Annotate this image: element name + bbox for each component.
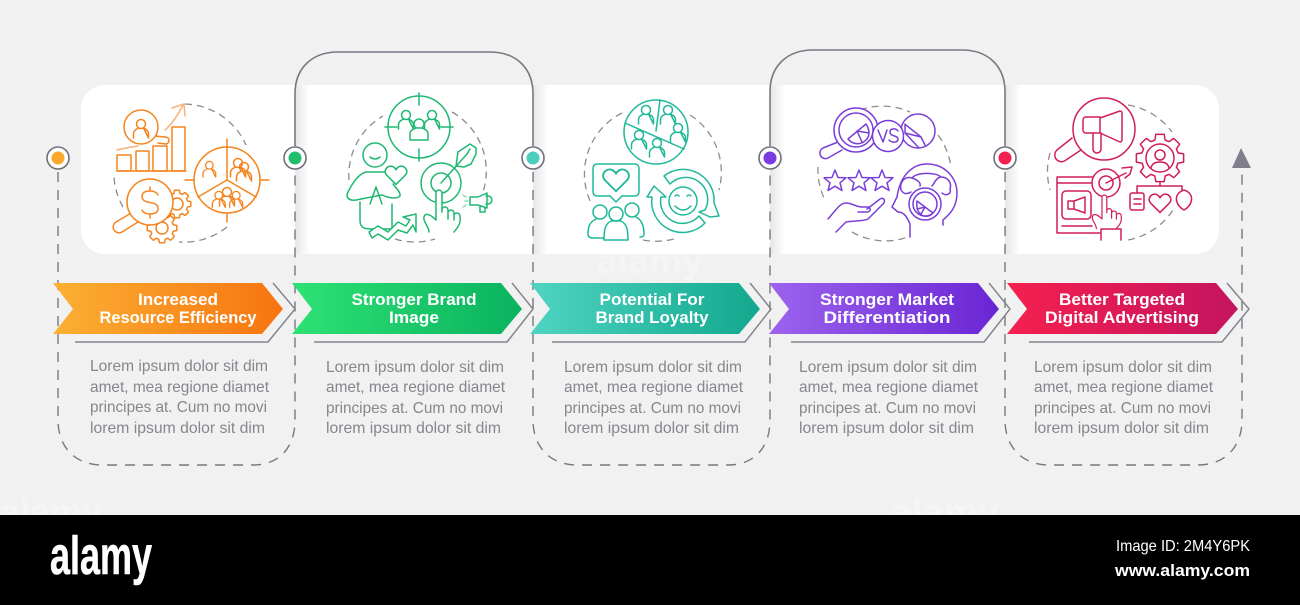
step 3 description: lorem ipsum dolor sit dim [564,420,739,437]
footer logo: alamy [50,526,152,586]
timeline marker 1 [47,147,69,169]
step 1 description: lorem ipsum dolor sit dim [90,420,265,437]
step 4 chevron and heading: Stronger Market [820,290,954,309]
watermark [0,240,999,532]
step 3 description: amet, mea regione diamet [564,379,744,396]
step 1 chevron and heading [53,283,295,342]
step 2 description: Lorem ipsum dolor sit dim [326,359,504,376]
step 5 chevron and heading: Digital Advertising [1045,308,1199,327]
step 2 description: lorem ipsum dolor sit dim [326,420,501,437]
arrowhead: end of timeline [1232,148,1251,168]
step 1 chevron and heading: Increased [138,290,218,309]
step 5 description: lorem ipsum dolor sit dim [1034,420,1209,437]
footer url: www.alamy.com [1114,561,1250,580]
step 4 description: amet, mea regione diamet [799,379,979,396]
solid connector arcs [295,50,1005,146]
icon: resource efficiency [113,104,269,243]
timeline marker 2 [284,147,306,169]
step 3 description: principes at. Cum no movi [564,400,741,417]
icon: brand loyalty [584,100,721,241]
footer band [0,515,1300,605]
step 5 description: Lorem ipsum dolor sit dim [1034,359,1212,376]
step 1 description: amet, mea regione diamet [90,379,270,396]
step 2 description [326,359,506,437]
step 5 description [1034,359,1214,437]
icon: digital advertising [1047,98,1192,240]
step 3 description [564,359,744,437]
icon: market differentiation [818,106,957,241]
step 1 chevron and heading: Resource Efficiency [100,308,257,327]
step 1 description: Lorem ipsum dolor sit dim [90,358,268,375]
step 4 description: Lorem ipsum dolor sit dim [799,359,977,376]
step 4 description: lorem ipsum dolor sit dim [799,420,974,437]
step 4 description: principes at. Cum no movi [799,400,976,417]
step 2 description: principes at. Cum no movi [326,400,503,417]
footer image id: Image ID: 2M4Y6PK [1116,538,1250,555]
step 2 description: amet, mea regione diamet [326,379,506,396]
timeline marker 5 [994,147,1016,169]
step 2 chevron and heading: Stronger Brand [352,290,476,309]
icon: stronger brand image [347,93,492,242]
step 4 chevron and heading: Differentiation [824,308,950,327]
step 3 chevron and heading: Brand Loyalty [596,308,709,327]
step 3 chevron and heading: Potential For [600,290,705,309]
step 4 description [799,359,979,437]
step 3 chevron and heading [530,283,771,342]
watermark: alamy [0,491,102,532]
step 4 chevron and heading [769,283,1010,342]
step 5 description: amet, mea regione diamet [1034,379,1214,396]
white card panel [81,85,1219,254]
step 5 chevron and heading [1007,283,1249,342]
step 1 description [90,358,270,437]
step 5 chevron and heading: Better Targeted [1059,290,1185,309]
timeline marker 4 [759,147,781,169]
watermark: alamy [891,491,999,532]
step 3 description: Lorem ipsum dolor sit dim [564,359,742,376]
step 1 description: principes at. Cum no movi [90,399,267,416]
step 5 description: principes at. Cum no movi [1034,400,1211,417]
dashed connector lines [58,172,1242,465]
timeline marker 3 [522,147,544,169]
watermark: alamy [597,240,703,281]
step 2 chevron and heading [292,283,533,342]
step 2 chevron and heading: Image [389,308,439,327]
